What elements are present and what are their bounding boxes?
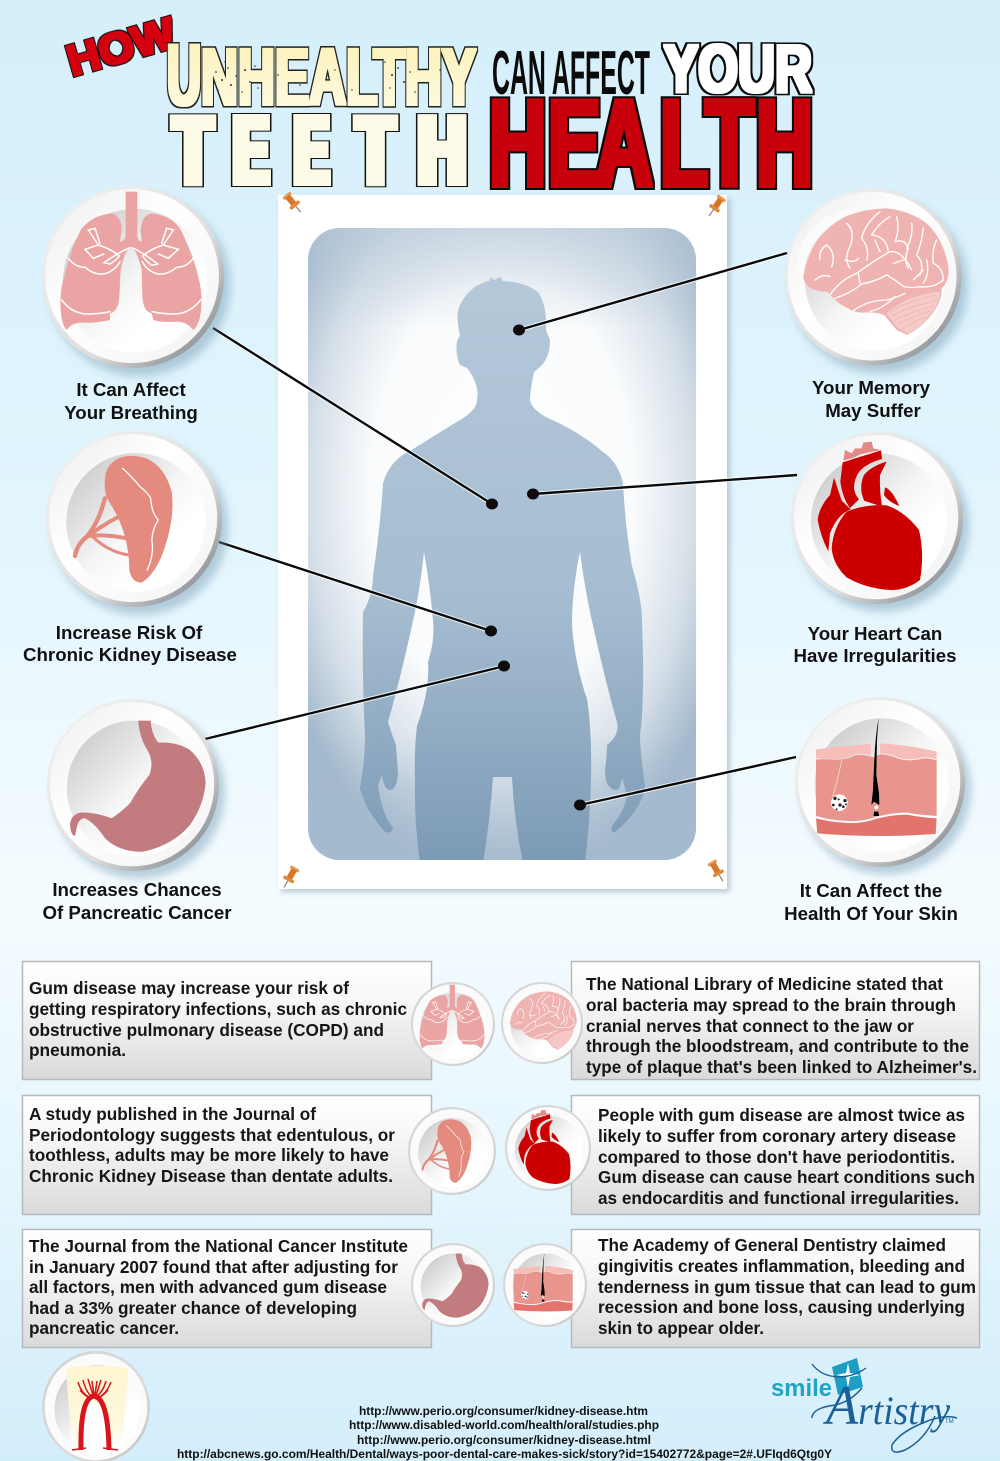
panel: skin text: skin to appear older. [598, 1318, 764, 1338]
title word: TEETH: H [418, 97, 466, 204]
title word: UNHEALTHY: NHEALTHY [201, 32, 476, 123]
title word: TEETH [174, 97, 466, 204]
connector lines and body markers [205, 253, 797, 810]
panel: skin text: tenderness in gum tissue that can lead to gum [598, 1277, 976, 1297]
label: pancreatic cancer: Increases Chances [52, 879, 222, 900]
panel: heart text: as endocarditis and functional irregularities. [598, 1188, 959, 1208]
panel: skin text: gingivitis creates inflammation, bleeding and [598, 1256, 965, 1276]
label: breathing: Your Breathing [64, 402, 198, 423]
panel: skin text [572, 1230, 980, 1348]
panel: pancreatic text: had a 33% greater chance of developing [29, 1298, 357, 1318]
panel: respiratory text: getting respiratory infections, such as chronic [29, 999, 407, 1019]
small icon: kidney [408, 1107, 496, 1195]
panel: respiratory text [22, 962, 432, 1080]
panel: heart text: compared to those don't have periodontitis. [598, 1147, 955, 1167]
pin: bottom right [706, 858, 728, 884]
icon: lungs [42, 186, 230, 376]
panel: memory text: type of plaque that's been linked to Alzheimer's. [586, 1057, 977, 1077]
label: memory: Your Memory [812, 377, 931, 398]
panel: kidney text [22, 1096, 432, 1214]
title word: YOUR: YOUR [664, 31, 812, 107]
small icon: skin [503, 1243, 587, 1327]
panel: pancreatic text: The Journal from the National Cancer Institute [29, 1236, 408, 1256]
body silhouette [360, 277, 645, 863]
panel: kidney text: toothless, adults may be more likely to have [29, 1145, 389, 1165]
label: skin: It Can Affect the [800, 880, 942, 901]
pin: top left [281, 191, 305, 216]
label: kidney [23, 622, 237, 665]
panel: kidney text: Chronic Kidney Disease than dentate adults. [29, 1166, 393, 1186]
panel: heart text: Gum disease can cause heart conditions such [598, 1167, 975, 1187]
label: heart: Your Heart Can [808, 623, 942, 644]
sources list: http://abcnews.go.com/Health/Dental/ways-poor-dental-care-makes-sick/story?id=15402772&page=2#.UFIqd6Qtg0Y [177, 1449, 832, 1461]
icon: brain [784, 188, 968, 373]
label: breathing [64, 379, 198, 423]
label: memory [812, 377, 931, 421]
panel: heart text: People with gum disease are almost twice as [598, 1105, 965, 1125]
panel: pancreatic text: all factors, men with advanced gum disease [29, 1277, 387, 1297]
sources list [177, 1406, 832, 1461]
title word: TEETH: T [174, 97, 212, 204]
small icon: heart [505, 1105, 591, 1191]
small icon: stomach [411, 1243, 495, 1327]
panel: skin text: The Academy of General Dentistry claimed [598, 1235, 946, 1255]
icon: tooth [42, 1351, 150, 1461]
label: pancreatic cancer [42, 879, 232, 923]
title word: TEETH: T [357, 97, 394, 204]
icon: heart [791, 432, 969, 612]
panel: kidney text: Periodontology suggests that edentulous, or [29, 1125, 395, 1145]
panel: respiratory text: Gum disease may increase your risk of [29, 978, 349, 998]
panel: skin text: recession and bone loss, causing underlying [598, 1297, 965, 1317]
label: skin: Health Of Your Skin [784, 903, 958, 924]
panel: memory text: The National Library of Medicine stated that [586, 974, 943, 994]
pin: top right [704, 194, 727, 219]
label: memory: May Suffer [825, 400, 921, 421]
poster panel with body silhouette [278, 191, 730, 892]
label: skin [784, 880, 958, 924]
panel: memory text [572, 962, 980, 1080]
icon: kidney [46, 431, 228, 615]
panel: pancreatic text: pancreatic cancer. [29, 1318, 179, 1338]
speckles on UNHEALTHY [215, 61, 441, 93]
title: CAN AFFECT [492, 39, 650, 108]
panel: kidney text: A study published in the Journal of [29, 1104, 316, 1124]
pin: bottom left [279, 864, 301, 890]
title word: UNHEALTHY [167, 25, 476, 124]
logo: Smile Artistry [771, 1358, 957, 1452]
sources list: http://www.disabled-world.com/health/oral/studies.php [349, 1420, 659, 1432]
panel: memory text: cranial nerves that connect to the jaw or [586, 1016, 914, 1036]
panel: heart text [572, 1096, 980, 1214]
icon: stomach [47, 699, 225, 879]
label: heart: Have Irregularities [793, 645, 957, 666]
title word: TEETH: E [234, 97, 268, 204]
logo: Smile Artistry: TM [945, 1419, 954, 1425]
sources list: http://www.perio.org/consumer/kidney-disease.htm [359, 1406, 648, 1418]
title word: HEALTH: HEALTH [489, 75, 813, 213]
label: heart [793, 623, 957, 666]
title [62, 9, 813, 213]
small icon: lungs [411, 982, 495, 1066]
panel: memory text: oral bacteria may spread to the brain through [586, 995, 956, 1015]
panel: pancreatic text [22, 1230, 432, 1348]
label: kidney: Chronic Kidney Disease [23, 644, 237, 665]
logo: Smile Artistry: smile [771, 1375, 832, 1402]
panel: heart text: likely to suffer from coronary artery disease [598, 1126, 956, 1146]
title word: TEETH: E [295, 97, 328, 204]
title word: UNHEALTHY: U [167, 25, 201, 124]
small icon: brain [501, 982, 583, 1064]
logo: Smile Artistry: Artistry [822, 1375, 950, 1437]
panel: respiratory text: obstructive pulmonary disease (COPD) and [29, 1020, 384, 1040]
label: pancreatic cancer: Of Pancreatic Cancer [42, 902, 232, 923]
panel: respiratory text: pneumonia. [29, 1040, 126, 1060]
panel: pancreatic text: in January 2007 found that after adjusting for [29, 1257, 398, 1277]
title word: HOW: HOW [62, 9, 181, 86]
label: kidney: Increase Risk Of [56, 622, 203, 643]
label: breathing: It Can Affect [76, 379, 186, 400]
icon: skin [795, 697, 971, 875]
panel: memory text: through the bloodstream, and contribute to the [586, 1036, 969, 1056]
sources list: http://www.perio.org/consumer/kidney-disease.html [357, 1435, 651, 1447]
